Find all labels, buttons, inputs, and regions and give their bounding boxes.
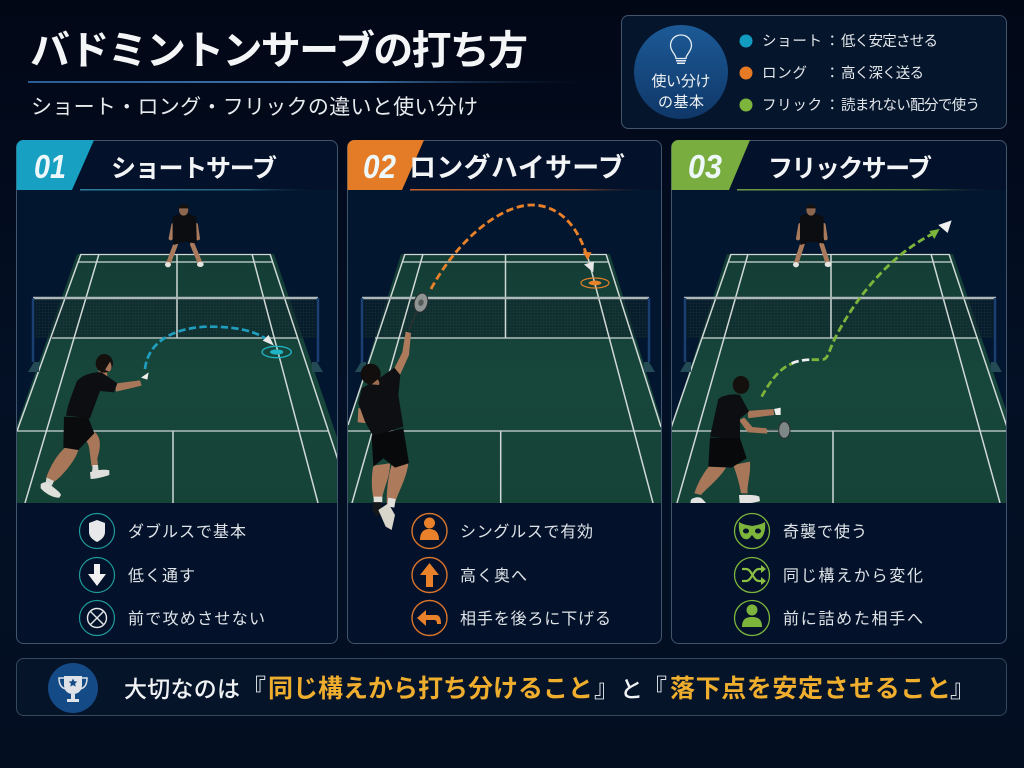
bullet: surprise: [734, 514, 867, 548]
bullet: surprise: 奇襲で使う: [783, 523, 867, 541]
legend: long: 高く深く送る: [841, 65, 924, 82]
callout: key takeaway: 』: [594, 675, 619, 703]
bullet: low: 低く通す: [128, 567, 195, 585]
legend: long: [740, 65, 924, 82]
legend: short: 低く安定させる: [841, 33, 938, 50]
bullet: same stance: [734, 558, 923, 592]
near player: [41, 354, 149, 498]
callout: key takeaway: 落下点を安定させること: [670, 675, 951, 703]
trajectory: long serve: [431, 205, 609, 289]
legend: flick: フリック: [762, 97, 822, 114]
header chip: 02: 02: [363, 148, 397, 185]
bullet: opponent forward: 前に詰めた相手へ: [783, 610, 923, 628]
bullet: singles: [412, 514, 593, 548]
header chip: 02: [348, 140, 424, 190]
callout: key takeaway: 』: [950, 675, 975, 703]
header chip: 01: 01: [34, 148, 66, 185]
bullet: singles: シングルスで有効: [460, 523, 593, 541]
trajectory: flick serve: [762, 220, 952, 397]
bullet: same stance: 同じ構えから変化: [783, 567, 923, 585]
legend: long: ロング: [762, 65, 807, 82]
court scene: short serve: [17, 190, 338, 503]
callout: key takeaway: と: [620, 676, 643, 702]
icon: light bulb badge: [634, 25, 728, 119]
callout: key takeaway: 『: [642, 675, 667, 703]
bullet: doubles: [80, 514, 246, 548]
header chip: 03: 03: [688, 148, 722, 185]
legend: flick: 読まれない配分で使う: [841, 97, 980, 114]
bullet: deny attack: 前で攻めさせない: [128, 610, 265, 628]
title: バドミントンサーブの打ち方: [30, 29, 528, 73]
panel: usage basics legend: [622, 16, 1006, 128]
callout: key takeaway: [16, 658, 1006, 716]
court scene: flick serve: [671, 190, 1007, 503]
icon: trophy: [48, 663, 98, 713]
panel: long high serve: [348, 140, 662, 644]
bullet: high and deep: 高く奥へ: [460, 567, 527, 585]
icon: light bulb badge: 使い分け: [652, 73, 710, 90]
callout: key takeaway: 同じ構えから打ち分けること: [268, 675, 593, 703]
legend: flick: [740, 97, 980, 114]
far player: [793, 204, 831, 267]
callout: key takeaway: 『: [241, 675, 266, 703]
legend: long: ：: [825, 66, 840, 82]
legend: flick: ：: [825, 98, 840, 114]
legend: short: ：: [825, 34, 840, 50]
bullet: push opponent back: [412, 600, 611, 636]
heading: flick serve: フリックサーブ: [768, 154, 932, 183]
panel: short serve: [16, 140, 338, 644]
court scene: long serve: [348, 254, 661, 503]
heading: short serve: ショートサーブ: [111, 154, 277, 183]
player: long serve: [358, 292, 430, 530]
far player: [165, 204, 204, 267]
legend: short: [740, 33, 938, 50]
bullet: high and deep: [412, 558, 527, 592]
bullet: low: [80, 558, 195, 592]
bullet: push opponent back: 相手を後ろに下げる: [460, 610, 611, 628]
trajectory: short serve: [145, 327, 291, 369]
subtitle: ショート・ロング・フリックの違いと使い分け: [31, 96, 478, 119]
bullet: deny attack: [80, 600, 265, 636]
header chip: 01: [16, 140, 94, 190]
panel: flick serve: [671, 140, 1007, 644]
near player: [690, 376, 790, 503]
legend: short: ショート: [762, 34, 822, 50]
bullet: opponent forward: [734, 600, 923, 636]
bullet: doubles: ダブルスで基本: [128, 522, 246, 541]
heading: long high serve: ロングハイサーブ: [409, 152, 625, 183]
header chip: 03: [672, 140, 750, 190]
callout: key takeaway: 大切なのは: [124, 676, 240, 702]
icon: light bulb badge: の基本: [658, 94, 704, 111]
